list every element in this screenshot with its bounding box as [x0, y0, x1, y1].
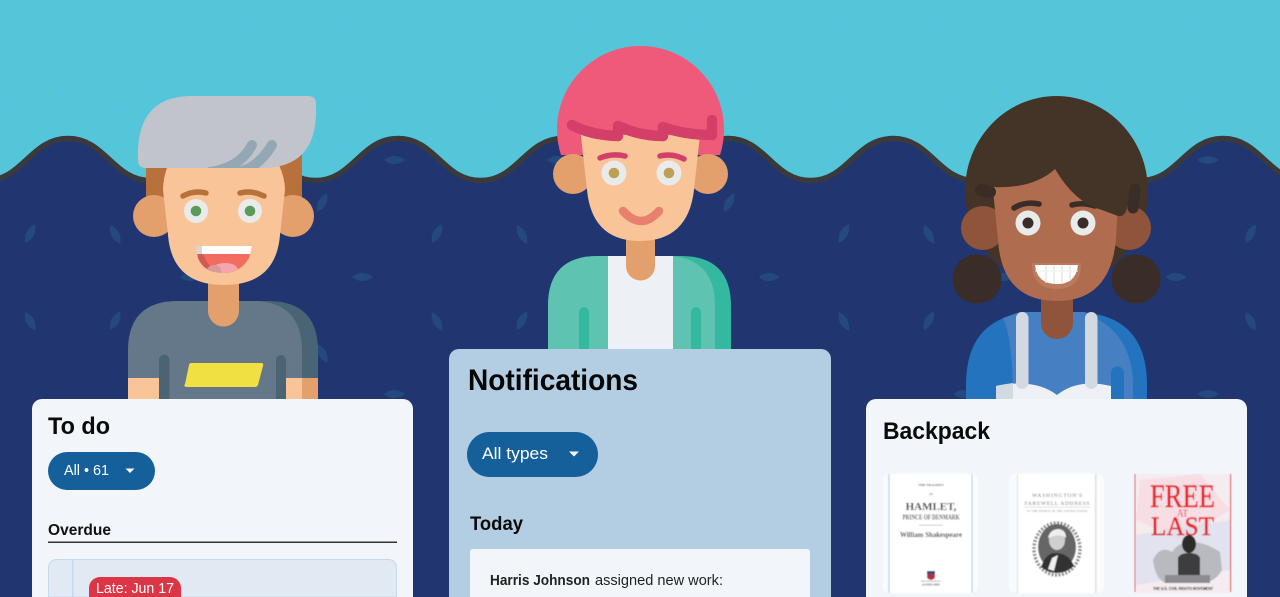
boy smile: [196, 246, 252, 273]
book: Free at Last: AT: [1177, 508, 1188, 520]
All types filter pill: [467, 432, 598, 477]
book: Washington's Farewell Address: TO THE PEOPLE OF THE UNITED STATES: [1026, 510, 1088, 513]
eyes: [1016, 210, 1096, 236]
Backpack heading: Backpack: [883, 418, 991, 445]
girl ears: [553, 154, 728, 194]
girl neck: [626, 225, 655, 280]
Overdue subheading: Overdue: [48, 522, 111, 539]
assignment row: [48, 560, 396, 597]
notification item: assigned new work:: [595, 573, 723, 589]
panel: Backpack: [866, 399, 1247, 597]
character: girl with dark hair: [952, 96, 1160, 399]
Overdue rule: [48, 542, 397, 543]
book: Hamlet: William Shakespeare: [900, 530, 963, 539]
open book: [996, 383, 1111, 399]
book: Hamlet: OF: [929, 492, 933, 496]
book: Hamlet: HAMLET,: [906, 501, 957, 513]
boy hair: [138, 96, 316, 172]
notification item: [470, 549, 810, 597]
panel: Notifications: [449, 349, 831, 597]
toothy smile: [1032, 263, 1081, 289]
face: [990, 160, 1120, 301]
Today subheading: Today: [470, 514, 523, 535]
book: Free at Last: [1134, 474, 1231, 593]
panel: To do: [32, 399, 413, 597]
ears: [961, 206, 1151, 250]
book: Free at Last: FREE: [1150, 479, 1215, 515]
girl eyebrows: [600, 155, 684, 159]
book: Free at Last: LAST: [1151, 512, 1214, 541]
navy wave background: [0, 136, 1280, 398]
dark hair back: [965, 96, 1148, 286]
pink hair: [557, 46, 724, 155]
All filter pill: All • 61: [64, 463, 109, 479]
girl fringe: [572, 120, 712, 136]
late badge: Late: Jun 17: [96, 581, 174, 597]
notification item: Harris Johnson: [490, 573, 590, 589]
character: girl with pink hair: [548, 46, 731, 349]
engraved portrait: [1034, 523, 1080, 575]
book: Hamlet: THE UNIVERSITY: [921, 580, 941, 583]
book: Washington's Farewell Address: [1009, 474, 1104, 593]
late badge: [89, 577, 181, 597]
character: boy with grey hair: [128, 96, 318, 399]
Notifications heading: Notifications: [468, 364, 638, 397]
All types filter pill: All types: [482, 444, 548, 463]
boy ears: [133, 195, 314, 237]
book: Hamlet: of ADELAIDE: [922, 584, 940, 586]
girl jacket: [548, 256, 731, 349]
girl face: [580, 128, 700, 241]
boy t-shirt: [128, 301, 318, 399]
overall straps: [1016, 312, 1098, 389]
Notifications card background: [449, 349, 831, 597]
To do heading: To do: [48, 413, 110, 440]
To do card background: [32, 399, 413, 597]
book: Hamlet: PRINCE OF DENMARK: [902, 514, 960, 522]
book: Free at Last: THE U.S. CIVIL RIGHTS MOVEMENT: [1153, 586, 1213, 591]
neck: [1041, 280, 1073, 339]
boy shirt badge: [184, 363, 263, 387]
sky background: [0, 0, 1280, 200]
girl smile: [623, 211, 659, 221]
crowd photo: [1153, 535, 1222, 583]
fringe: [972, 120, 1135, 216]
Backpack card background: [866, 399, 1247, 597]
book: Washington's Farewell Address: FAREWELL ADDRESS: [1024, 501, 1090, 507]
book: Hamlet: THE TRAGEDY: [918, 483, 944, 487]
hair buns: [952, 254, 1160, 304]
eyebrows: [1014, 203, 1095, 208]
All filter pill: [48, 452, 155, 490]
boy neck: [208, 270, 239, 326]
dress: [966, 312, 1147, 399]
boy eyebrows: [183, 192, 264, 196]
boy back hair: [146, 150, 302, 200]
boy eyes: [184, 199, 262, 223]
girl eyes: [602, 160, 682, 186]
book: Washington's Farewell Address: WASHINGTON'S: [1032, 493, 1082, 499]
boy face: [163, 165, 285, 285]
book: Hamlet: [883, 474, 978, 593]
